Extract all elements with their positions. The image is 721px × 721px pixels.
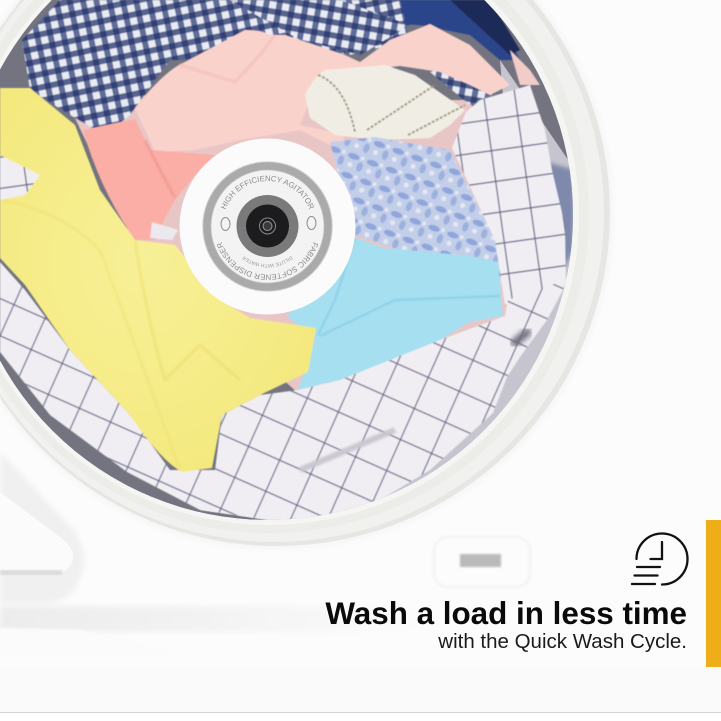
clothes underlay bbox=[75, 95, 520, 395]
drum wall, right side bbox=[200, 60, 575, 525]
coral garment bbox=[83, 119, 215, 240]
hub marks bbox=[221, 218, 230, 230]
lid latch slot bbox=[434, 537, 530, 587]
hub label: lower: FABRIC SOFTENER DISPENSER bbox=[217, 242, 318, 280]
drum interior shadow bbox=[0, 0, 573, 520]
white plaid sheet, right fold bbox=[452, 85, 566, 305]
subheading: with the Quick Wash Cycle. bbox=[438, 630, 687, 652]
hub label: upper: HIGH EFFICIENCY AGITATOR bbox=[220, 176, 314, 210]
yellow towel bbox=[0, 88, 316, 472]
navy garment bbox=[400, 0, 520, 61]
hub label: small lower line: DILUTE WITH WATER bbox=[242, 256, 293, 268]
icon: clock with speed lines bbox=[630, 532, 689, 586]
light blue towel bbox=[287, 238, 503, 390]
navy gingham shirt bbox=[22, 0, 212, 128]
control console recess, lower left bbox=[0, 452, 84, 604]
blue floral garment bbox=[330, 136, 502, 284]
pink garment bbox=[135, 24, 510, 152]
hub agitator cap bbox=[180, 138, 356, 314]
small plaid scrap bbox=[0, 155, 40, 200]
yellow accent bar bbox=[706, 520, 721, 667]
drum rim bbox=[0, 0, 613, 549]
gray ring bbox=[207, 166, 328, 287]
white plaid sheet, bottom bbox=[0, 262, 566, 522]
cream embroidered garment bbox=[305, 65, 465, 140]
headline: Wash a load in less time bbox=[325, 596, 687, 631]
front ledge shading bbox=[0, 606, 721, 721]
hub center bbox=[236, 195, 298, 257]
drum interior and clothes bbox=[0, 0, 575, 525]
